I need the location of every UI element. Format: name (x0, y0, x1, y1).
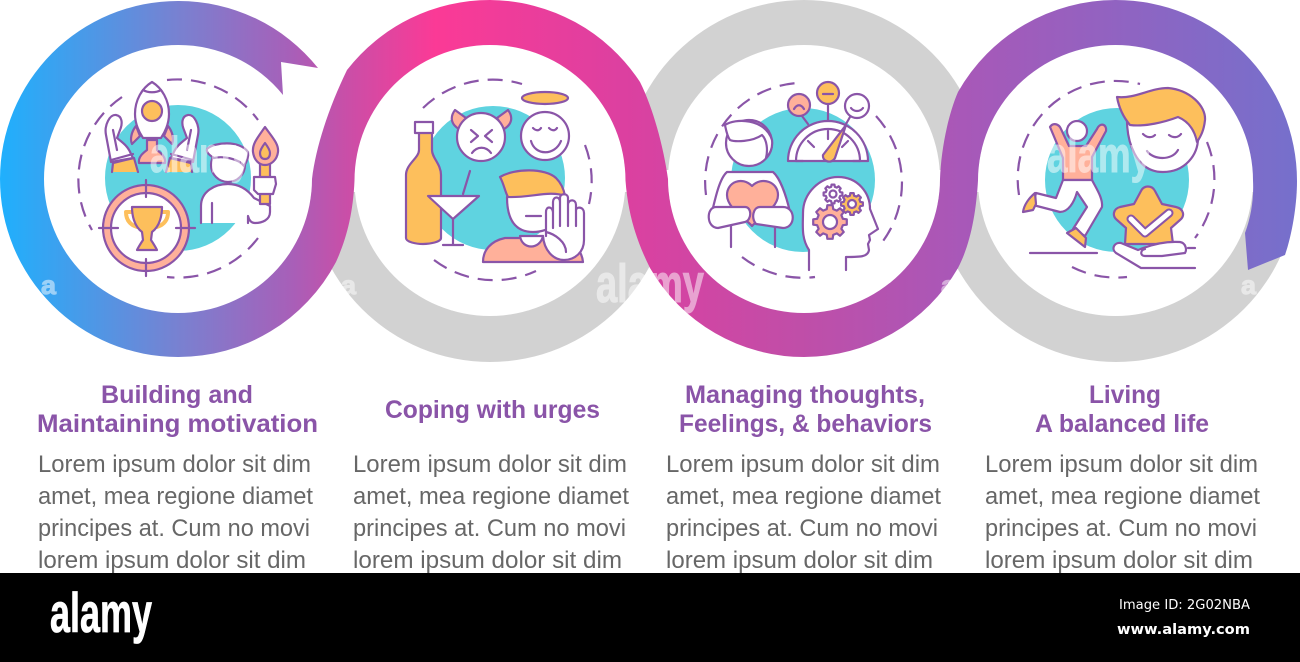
heading: Managing thoughts, (685, 381, 925, 409)
serpentine gradient ribbon with arrow end (0, 0, 1297, 357)
body text (353, 451, 629, 574)
heading: Building and (101, 381, 253, 409)
watermarks: alamy (150, 127, 250, 183)
watermarks: alamy (596, 254, 704, 314)
body text: lorem ipsum dolor sit dim (38, 547, 306, 574)
panel: managing thoughts, feelings and behaviors (666, 82, 941, 574)
body text: principes at. Cum no movi (353, 515, 626, 542)
body text: amet, mea regione diamet (666, 483, 941, 510)
footer bar (0, 573, 1300, 662)
icon: rocket, trophy and torch bearer (78, 79, 278, 278)
body text: Lorem ipsum dolor sit dim (985, 451, 1258, 478)
watermarks (41, 127, 1257, 314)
heading: Coping with urges (385, 396, 600, 424)
footer url: www.alamy.com (1117, 622, 1250, 638)
body text: Lorem ipsum dolor sit dim (353, 451, 627, 478)
body text: amet, mea regione diamet (353, 483, 629, 510)
panel: coping with urges (353, 80, 629, 574)
body text: lorem ipsum dolor sit dim (985, 547, 1253, 574)
body text (38, 451, 313, 574)
panel: living a balanced life (985, 81, 1260, 574)
panel: building and maintaining motivation (37, 79, 318, 574)
heading: Living (1089, 381, 1161, 409)
icon: jumping figure, smiling face, star in hand (1018, 81, 1214, 278)
body text: lorem ipsum dolor sit dim (666, 547, 933, 574)
heading (1035, 381, 1209, 438)
body text: principes at. Cum no movi (38, 515, 310, 542)
footer logo: alamy (50, 581, 152, 644)
watermarks: a (341, 270, 357, 300)
body text: lorem ipsum dolor sit dim (353, 547, 622, 574)
body text: Lorem ipsum dolor sit dim (666, 451, 940, 478)
icon: gauge, person with heart, head with gears (705, 82, 902, 278)
watermarks: alamy (1047, 127, 1151, 183)
body text: amet, mea regione diamet (38, 483, 313, 510)
watermarks: a (1241, 270, 1257, 300)
icon: bottle, martini, devil and angel faces, refusing boy (406, 80, 592, 280)
watermarks: a (41, 270, 57, 300)
body text: Lorem ipsum dolor sit dim (38, 451, 311, 478)
body text: principes at. Cum no movi (666, 515, 938, 542)
heading: A balanced life (1035, 410, 1209, 438)
heading (37, 381, 318, 438)
body text: amet, mea regione diamet (985, 483, 1260, 510)
grey rings behind the ribbon (310, 0, 1297, 362)
heading: Feelings, & behaviors (679, 410, 932, 438)
body text (666, 451, 941, 574)
heading: Maintaining motivation (37, 410, 318, 438)
watermarks: a (941, 270, 957, 300)
footer image id: Image ID: 2G02NBA (1119, 597, 1251, 613)
body text (985, 451, 1260, 574)
heading (679, 381, 932, 438)
body text: principes at. Cum no movi (985, 515, 1257, 542)
